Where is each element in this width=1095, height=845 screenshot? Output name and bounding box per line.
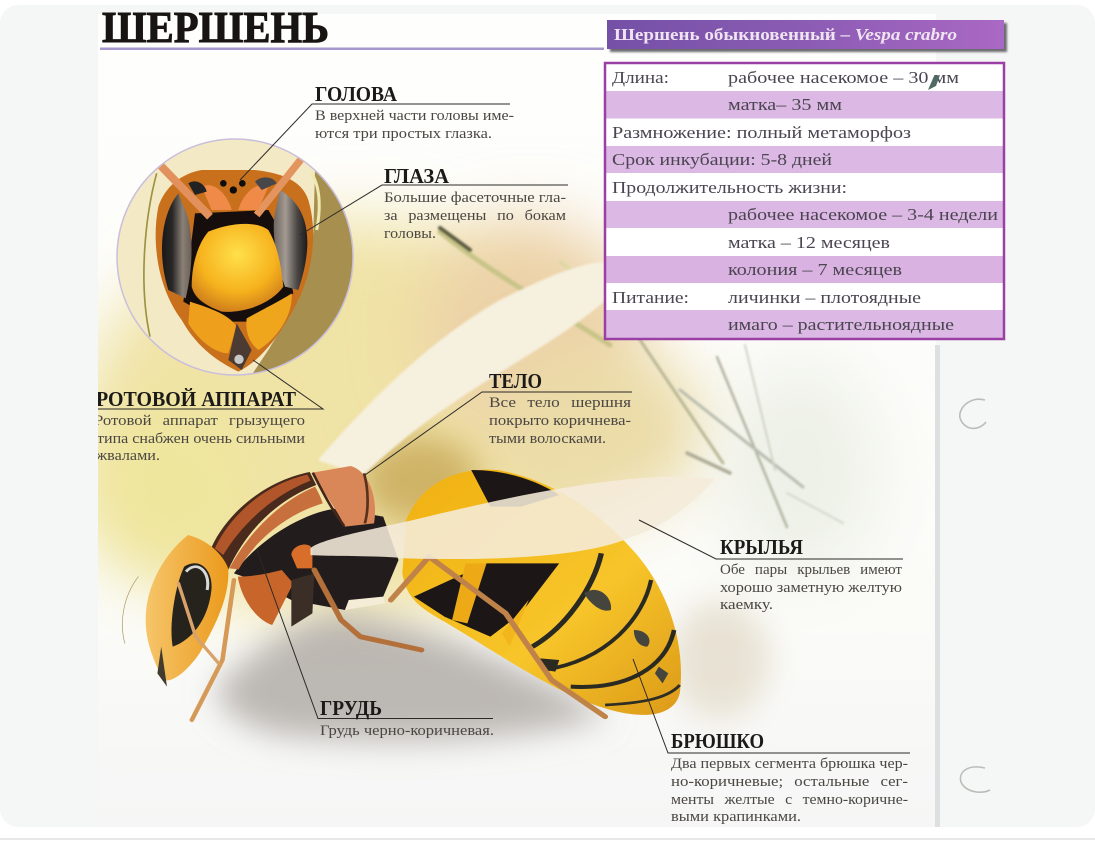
callout: тело	[365, 369, 632, 475]
species header bar: Шершень обыкновенный – Vespa crabro	[614, 25, 957, 44]
facts table: Размножение: полный метаморфоз	[612, 123, 911, 142]
facts table: матка – 12 месяцев	[728, 233, 890, 252]
dark frame	[183, 210, 293, 322]
icon: punched hole bottom	[960, 767, 990, 792]
facts table: рабочее насекомое – 30 мм	[728, 68, 960, 87]
lower wing	[310, 477, 715, 559]
abdomen	[402, 470, 681, 715]
rock	[215, 612, 610, 741]
callout: грудь: Грудь черно-коричневая.	[320, 723, 494, 739]
wasp illustration	[122, 466, 715, 720]
callout: брюшко	[633, 659, 910, 825]
facts table: личинки – плотоядные	[728, 288, 921, 307]
facts table: Продолжительность жизни:	[612, 178, 847, 197]
facts table: имаго – растительноядные	[728, 315, 954, 334]
page fold strip	[935, 345, 940, 827]
callout: грудь: ГРУДЬ	[320, 696, 382, 720]
watercolor wash	[80, 220, 880, 720]
ocelli	[220, 180, 227, 187]
facts table	[605, 63, 1004, 339]
painted scene	[98, 14, 936, 758]
callout: глаза: за размещены по бокам	[384, 208, 566, 224]
callout: глаза: Большие фасеточные гла-	[384, 190, 566, 206]
callout: брюшко: выми крапинками.	[671, 809, 801, 825]
callout: голова: ГОЛОВА	[315, 82, 398, 106]
callout: ротовой аппарат: жвалами.	[95, 448, 160, 464]
mandibles	[188, 302, 237, 353]
callout: брюшко: менты желтые с темно-коричне-	[671, 792, 908, 808]
callout: крылья: КРЫЛЬЯ	[720, 535, 803, 559]
callout: тело: тыми волосками.	[489, 431, 606, 447]
facts table: Питание:	[612, 288, 689, 307]
facts table: рабочее насекомое – 3-4 недели	[728, 205, 998, 224]
facts table: Длина:	[612, 68, 669, 87]
facts table: колония – 7 месяцев	[728, 260, 902, 279]
species header bar	[607, 20, 1007, 52]
callout: брюшко: БРЮШКО	[671, 729, 764, 753]
callout: тело: Все тело шершня	[489, 395, 631, 411]
head capsule	[156, 170, 313, 372]
clypeus	[192, 224, 283, 312]
head close-up circle	[116, 138, 354, 376]
callout: тело: покрыто коричнева-	[489, 413, 631, 429]
callout: глаза	[300, 164, 568, 242]
callout: брюшко: Два первых сегмента брюшка чер-	[671, 756, 908, 772]
callout: голова	[240, 82, 514, 180]
eyes	[162, 193, 192, 298]
callout: брюшко: но-коричневые; остальные сег-	[671, 774, 908, 790]
callout: голова: ются три простых глазка.	[315, 126, 492, 142]
tan background	[253, 172, 352, 373]
head	[146, 535, 228, 687]
upper wing	[318, 262, 606, 476]
callout: ротовой аппарат	[94, 360, 323, 464]
callout: крылья	[639, 520, 903, 613]
callout: крылья: Обе пары крыльев имеют	[720, 562, 903, 578]
bottom divider	[0, 838, 1095, 840]
callout: ротовой аппарат: типа снабжен очень сильными	[97, 431, 305, 447]
callout: голова: В верхней части головы име-	[315, 108, 514, 124]
facts table: матка– 35 мм	[728, 95, 843, 114]
antennae	[161, 166, 210, 217]
callout: ротовой аппарат: Ротовой аппарат грызущего	[94, 413, 305, 429]
icon: punched hole top	[960, 399, 986, 428]
title rule	[100, 48, 604, 50]
legs	[122, 557, 605, 720]
callout: крылья: хорошо заметную желтую	[720, 580, 902, 596]
title: ШЕРШЕНЬ	[102, 3, 329, 52]
callout: ротовой аппарат: РОТОВОЙ АППАРАТ	[96, 387, 296, 411]
thorax	[211, 466, 399, 627]
callout: тело: ТЕЛО	[489, 369, 542, 393]
callout: грудь	[257, 550, 494, 739]
callout: глаза: головы.	[384, 226, 436, 242]
callout: крылья: каемку.	[720, 597, 773, 613]
grass stems	[440, 228, 843, 527]
facts table: Срок инкубации: 5-8 дней	[612, 150, 832, 169]
callout: глаза: ГЛАЗА	[384, 164, 450, 188]
